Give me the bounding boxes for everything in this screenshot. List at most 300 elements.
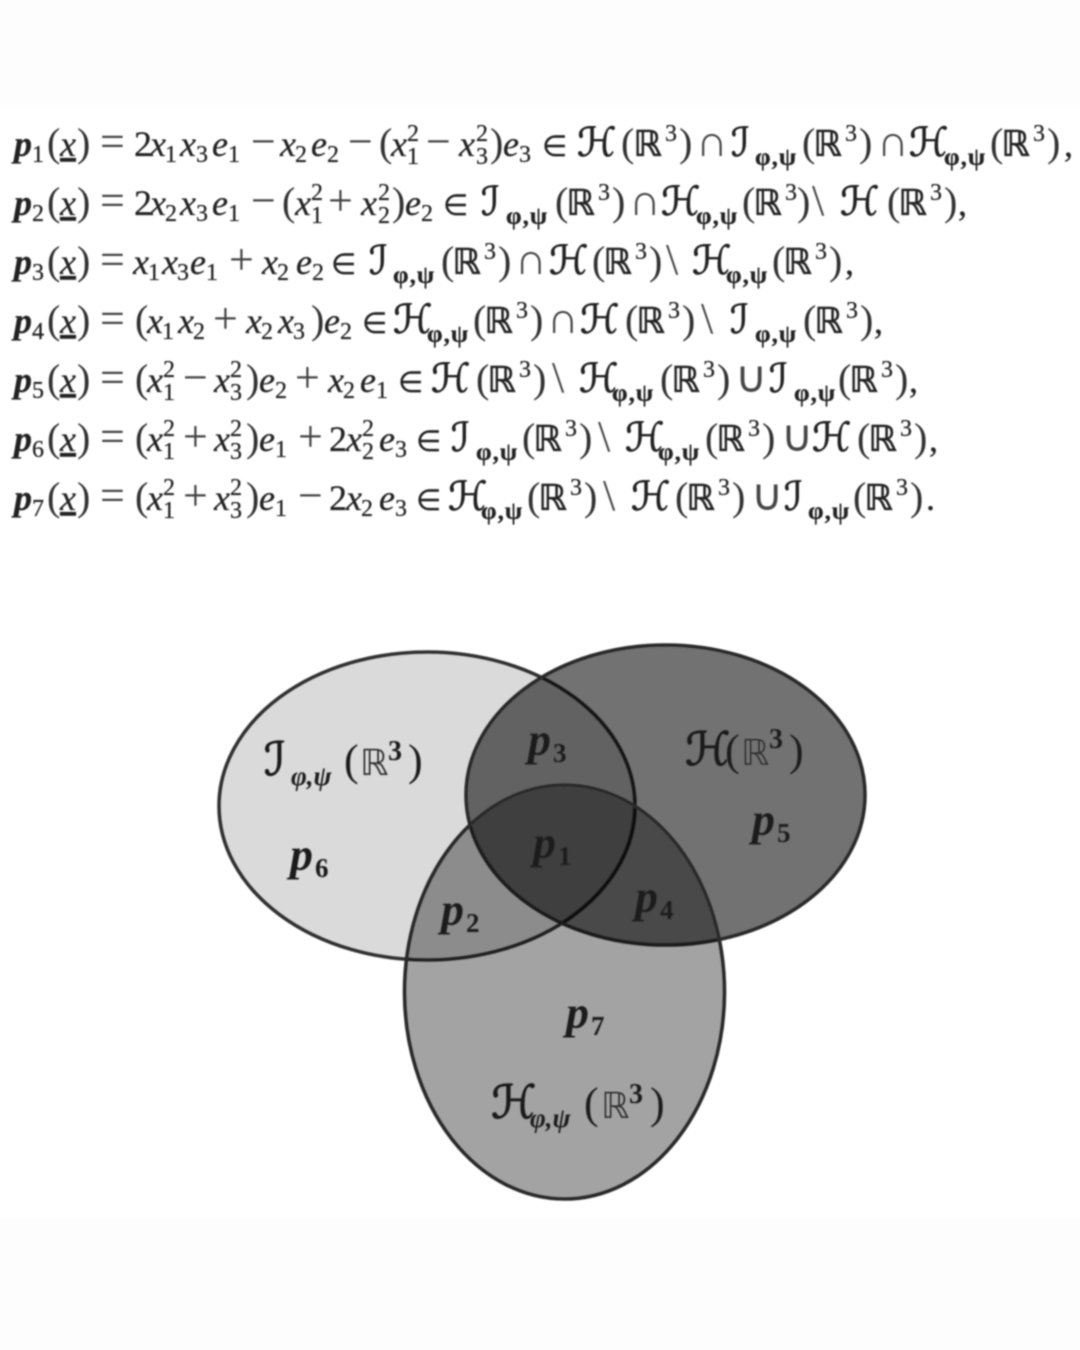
formula p5: ) [246, 356, 259, 401]
formula p2: ℋ [661, 179, 701, 225]
formula p1: − [348, 117, 373, 166]
formula p1: x [179, 124, 196, 164]
formula p4: + [213, 294, 238, 343]
formula p2: φ,ψ [696, 203, 738, 230]
formula p5: ) [717, 356, 730, 401]
formula p4: ) [860, 297, 873, 342]
formula p3: ∩ [515, 235, 547, 284]
formula p5: ℝ [487, 360, 516, 401]
formula p2: ℝ [566, 183, 595, 224]
formula p2: e [405, 183, 421, 223]
formula p7: ∈ [416, 485, 441, 517]
formula p1: 3 [476, 144, 488, 170]
formula p3: = [100, 235, 125, 284]
formula p4: ℝ [484, 301, 513, 342]
formula p4: 3 [293, 319, 305, 345]
formula p7: x [213, 478, 230, 518]
formula p2: 2 [421, 201, 433, 227]
formula p6: ) [246, 415, 259, 460]
label p1: p [529, 817, 556, 868]
set I ellipse [219, 652, 635, 960]
formula p2: 2 [165, 201, 177, 227]
label: H phi psi set name: 3 [629, 1079, 643, 1110]
label p4: 4 [660, 895, 674, 925]
formula p4: e [324, 301, 340, 341]
formula p7: ∪ [751, 471, 783, 520]
formula p4: x [177, 301, 194, 341]
formula p5: + [295, 353, 320, 402]
formula p6: 1 [163, 439, 175, 465]
formula p2: 2 [311, 180, 323, 206]
formula p1: ) [1047, 120, 1060, 165]
formula p4: ℋ [393, 297, 433, 343]
formula p2: x [149, 183, 166, 223]
formula p3: ) [649, 238, 662, 283]
formula p4: 1 [162, 319, 174, 345]
formula p3: p [11, 242, 32, 282]
formula p1: φ,ψ [944, 144, 986, 171]
formula p3: ℋ [549, 238, 589, 284]
formula p2: \ [812, 176, 825, 225]
formula p1: p [11, 124, 32, 164]
formula p1: ( [47, 120, 60, 165]
formula p2: ∈ [443, 190, 468, 222]
formula p6: ℝ [533, 419, 562, 460]
formula p2: ℝ [898, 183, 927, 224]
formula p1: ℝ [813, 124, 842, 165]
formula p6: x [146, 419, 163, 459]
formula p5: ∈ [398, 367, 423, 399]
formula p5: 2 [275, 378, 287, 404]
formula p4: p [11, 301, 32, 341]
set H phi psi ellipse [404, 785, 724, 1199]
formula p7: x [345, 478, 362, 518]
formula p1: ) [490, 120, 503, 165]
formula p1: 3 [1033, 121, 1045, 147]
label: I set name: ( [344, 736, 359, 785]
formula p3: ) [77, 238, 90, 283]
formula p4: ) [682, 297, 695, 342]
formula p7: ) [246, 474, 259, 519]
formula p6: 2 [163, 416, 175, 442]
formula p1: 1 [32, 142, 44, 168]
formula p2: 3 [785, 180, 797, 206]
formula p6: ) [914, 415, 927, 460]
formula p6: p [11, 419, 32, 459]
formula p1: − [251, 117, 276, 166]
formula p7: φ,ψ [481, 498, 523, 525]
formula p3: ∈ [331, 249, 356, 281]
formula p2: 3 [598, 180, 610, 206]
formula p4: ℝ [814, 301, 843, 342]
formula p3: , [845, 242, 854, 282]
formula p2: ) [392, 179, 405, 224]
label: H phi psi set name: ) [650, 1079, 665, 1128]
set H ellipse [466, 645, 865, 945]
formula p2: = [100, 176, 125, 225]
formula p6: ( [135, 415, 148, 460]
formula p2: 3 [930, 180, 942, 206]
formula p1: ℝ [1001, 124, 1030, 165]
formula p5: 1 [163, 380, 175, 406]
formula p6: ℋ [625, 415, 665, 461]
formula p5: ( [660, 356, 673, 401]
formula p2: − [251, 176, 276, 225]
formula p7: 2 [230, 475, 242, 501]
formula p1: 3 [845, 121, 857, 147]
label: I set name: φ,ψ [291, 761, 333, 791]
formula p7: 3 [570, 475, 582, 501]
formula p7: e [379, 478, 395, 518]
formula p2: e [212, 183, 228, 223]
formula p6: 2 [230, 416, 242, 442]
formula p7: ℝ [864, 478, 893, 519]
formula p3: ℝ [603, 242, 632, 283]
label p2: 2 [466, 908, 480, 938]
label: I set name: ) [408, 736, 423, 785]
formula p4: φ,ψ [755, 321, 797, 348]
formula p2: 2 [378, 203, 390, 229]
label p7: 7 [591, 1011, 604, 1041]
formula p5: \ [552, 353, 565, 402]
label: H set name: ) [789, 726, 804, 775]
formula p5: x [59, 360, 76, 400]
formula p4: ( [473, 297, 486, 342]
formula p3: ) [829, 238, 842, 283]
formula p2: ) [77, 179, 90, 224]
formula p4: = [100, 294, 125, 343]
formula p6: 3 [565, 416, 577, 442]
formula p5: ( [47, 356, 60, 401]
formula p7: 7 [32, 496, 44, 522]
formula p6: 3 [230, 439, 242, 465]
formula p6: 2 [329, 419, 347, 459]
formula p5: = [100, 353, 125, 402]
formula p5: ( [838, 356, 851, 401]
formula p3: ( [441, 238, 454, 283]
formula p1: ℝ [633, 124, 662, 165]
formula p2: 1 [228, 201, 240, 227]
formula p5: φ,ψ [794, 380, 836, 407]
label p6: p [286, 829, 313, 880]
formula p3: x [161, 242, 178, 282]
label p1: 1 [558, 841, 572, 871]
formula p4: x [245, 301, 262, 341]
formula p5: ℋ [579, 356, 619, 402]
formula p2: ( [555, 179, 568, 224]
formula p6: x [345, 419, 362, 459]
formula p7: 1 [275, 496, 287, 522]
formula p2: ℐ [481, 179, 500, 225]
formula p1: ( [379, 120, 392, 165]
formula p4: ∈ [362, 308, 387, 340]
formula p4: ) [530, 297, 543, 342]
formula p6: ) [579, 415, 592, 460]
label: H phi psi set name: ℋ [491, 1075, 536, 1129]
formula p2: φ,ψ [506, 203, 548, 230]
formula p6: , [929, 419, 938, 459]
formula p7: ( [853, 474, 866, 519]
label: I set name: ℝ [360, 743, 389, 784]
formula p3: 3 [815, 239, 827, 265]
formula p7: x [59, 478, 76, 518]
formula p7: ℋ [448, 474, 488, 520]
formula p6: ( [47, 415, 60, 460]
formula p3: e [190, 242, 206, 282]
formula p2: ( [887, 179, 900, 224]
bottom band [0, 1218, 1080, 1350]
formula p6: ) [77, 415, 90, 460]
formula p7: p [11, 478, 32, 518]
formula p2: + [328, 176, 353, 225]
formula p4: x [146, 301, 163, 341]
formula p6: ℐ [451, 415, 470, 461]
formula p2: x [294, 183, 311, 223]
formula p4: ℝ [636, 301, 665, 342]
formula p1: ∩ [696, 117, 728, 166]
formula p5: x [213, 360, 230, 400]
formula p4: ∩ [547, 294, 579, 343]
formula p6: ( [522, 415, 535, 460]
formula p7: 2 [361, 496, 373, 522]
formula p1: 2 [407, 121, 419, 147]
formula p6: = [100, 412, 125, 461]
label p6: 6 [315, 853, 328, 883]
formula p6: ∪ [781, 412, 813, 461]
formula p5: ∪ [735, 353, 767, 402]
formula p4: 2 [261, 319, 273, 345]
formula p2: ) [612, 179, 625, 224]
label: H set name: ℝ [741, 733, 770, 774]
formula p5: 2 [230, 357, 242, 383]
formula p2: 2 [134, 183, 152, 223]
formula p2: ℝ [753, 183, 782, 224]
formula p6: 1 [275, 437, 287, 463]
formula p7: 2 [329, 478, 347, 518]
formula p1: = [100, 117, 125, 166]
formula p1: ( [621, 120, 634, 165]
formula p4: x [59, 301, 76, 341]
formula p4: 3 [846, 298, 858, 324]
formula p2: ) [944, 179, 957, 224]
formula p7: \ [603, 471, 616, 520]
formula p6: 6 [32, 437, 44, 463]
formula p7: ) [910, 474, 923, 519]
top band [0, 0, 1080, 108]
formula p7: φ,ψ [808, 498, 850, 525]
formula p5: ) [895, 356, 908, 401]
formula p5: e [259, 360, 275, 400]
label p4: p [631, 871, 658, 922]
formula p7: ℝ [538, 478, 567, 519]
formula p7: ( [675, 474, 688, 519]
formula p5: 2 [343, 378, 355, 404]
formula p6: x [59, 419, 76, 459]
formula p6: 2 [362, 439, 374, 465]
formula p6: ℝ [868, 419, 897, 460]
formula p2: x [179, 183, 196, 223]
formula p1: x [458, 124, 475, 164]
formula p1: ℋ [909, 120, 949, 166]
formula p3: 3 [635, 239, 647, 265]
formula p7: − [298, 471, 323, 520]
formula p4: 3 [516, 298, 528, 324]
formula p4: 2 [340, 319, 352, 345]
formula p4: 3 [668, 298, 680, 324]
venn diagram [219, 645, 865, 1199]
formula p3: 2 [277, 260, 289, 286]
formula p1: φ,ψ [755, 144, 797, 171]
formula p4: , [874, 301, 883, 341]
formula p6: ( [857, 415, 870, 460]
formula p7: ( [47, 474, 60, 519]
formula p6: e [379, 419, 395, 459]
formula p3: ( [772, 238, 785, 283]
label: H set name: 3 [769, 724, 783, 755]
formula list [11, 117, 1073, 525]
formula p7: ( [135, 474, 148, 519]
formula p1: 2 [134, 124, 152, 164]
formula p3: x [132, 242, 149, 282]
formula p4: \ [701, 294, 714, 343]
label p7: p [562, 987, 589, 1038]
formula p1: 3 [196, 142, 208, 168]
formula p5: ℋ [431, 356, 471, 402]
formula p2: ( [282, 179, 295, 224]
formula p3: ( [47, 238, 60, 283]
formula p3: x [59, 242, 76, 282]
formula p7: ) [732, 474, 745, 519]
formula p1: 3 [519, 142, 531, 168]
formula p2: ( [47, 179, 60, 224]
formula p7: ℝ [686, 478, 715, 519]
formula p1: x [149, 124, 166, 164]
formula p4: ( [47, 297, 60, 342]
formula p2: , [958, 183, 967, 223]
formula p7: 3 [896, 475, 908, 501]
formula p1: e [311, 124, 327, 164]
formula p1: , [1064, 124, 1073, 164]
formula p7: 3 [395, 496, 407, 522]
formula p7: 2 [163, 475, 175, 501]
formula p1: ) [859, 120, 872, 165]
formula p1: ∈ [542, 131, 567, 163]
label: H set name: ℋ [685, 722, 730, 776]
label: I set name: ℐ [264, 732, 286, 786]
formula p1: ) [77, 120, 90, 165]
formula p5: 3 [703, 357, 715, 383]
formula p4: ℐ [730, 297, 749, 343]
formula p4: ( [803, 297, 816, 342]
formula p5: 3 [230, 380, 242, 406]
label: H phi psi set name: φ,ψ [530, 1103, 572, 1133]
formula p6: 3 [395, 437, 407, 463]
formula p6: ∈ [416, 426, 441, 458]
formula p1: ) [679, 120, 692, 165]
formula p6: \ [598, 412, 611, 461]
formula p3: 1 [148, 260, 160, 286]
formula p6: e [259, 419, 275, 459]
formula p1: ∩ [877, 117, 909, 166]
formula p6: ) [762, 415, 775, 460]
label p5: p [748, 794, 775, 845]
label: H phi psi set name: ( [584, 1079, 599, 1128]
formula p1: x [279, 124, 296, 164]
formula p5: φ,ψ [612, 380, 654, 407]
formula p7: 1 [163, 498, 175, 524]
formula p5: ℐ [769, 356, 788, 402]
formula p4: φ,ψ [427, 321, 469, 348]
formula p5: e [360, 360, 376, 400]
label: H phi psi set name: ℝ [601, 1086, 630, 1127]
formula p6: 3 [900, 416, 912, 442]
formula p2: 2 [32, 201, 44, 227]
formula p3: 3 [32, 260, 44, 286]
formula p4: ( [135, 297, 148, 342]
formula p5: p [11, 360, 32, 400]
formula p6: φ,ψ [476, 439, 518, 466]
formula p3: ℝ [452, 242, 481, 283]
formula p7: . [926, 478, 935, 518]
formula p6: φ,ψ [658, 439, 700, 466]
formula p1: ( [990, 120, 1003, 165]
formula p7: ) [77, 474, 90, 519]
formula p7: ℐ [784, 474, 803, 520]
formula p7: x [146, 478, 163, 518]
formula p7: ℋ [631, 474, 671, 520]
formula p3: ( [592, 238, 605, 283]
formula p4: 2 [193, 319, 205, 345]
formula p2: ℋ [840, 179, 880, 225]
formula p5: x [327, 360, 344, 400]
formula p6: ℝ [716, 419, 745, 460]
formula p7: + [183, 471, 208, 520]
formula p3: φ,ψ [726, 262, 768, 289]
formula p5: 2 [163, 357, 175, 383]
formula p1: x [390, 124, 407, 164]
formula p2: 1 [311, 203, 323, 229]
formula p5: − [183, 353, 208, 402]
formula p3: 3 [177, 260, 189, 286]
formula p1: e [212, 124, 228, 164]
formula p7: = [100, 471, 125, 520]
formula p7: 3 [230, 498, 242, 524]
formula p4: 4 [32, 319, 44, 345]
formula p2: ) [797, 179, 810, 224]
formula p3: ℝ [783, 242, 812, 283]
formula p1: 1 [165, 142, 177, 168]
formula p5: ( [135, 356, 148, 401]
formula p5: ) [533, 356, 546, 401]
formula p6: ℋ [812, 415, 852, 461]
formula p6: ( [705, 415, 718, 460]
formula p2: p [11, 183, 32, 223]
formula p3: ℋ [692, 238, 732, 284]
formula p1: e [503, 124, 519, 164]
label p3: p [524, 714, 551, 765]
formula p3: ℐ [369, 238, 388, 284]
formula p7: e [259, 478, 275, 518]
formula p1: 1 [228, 142, 240, 168]
formula p2: x [360, 183, 377, 223]
formula p2: 2 [378, 180, 390, 206]
formula p7: ) [584, 474, 597, 519]
formula p5: 5 [32, 378, 44, 404]
formula p6: 2 [362, 416, 374, 442]
formula p4: ) [77, 297, 90, 342]
formula p5: , [909, 360, 918, 400]
label p3: 3 [553, 738, 566, 768]
